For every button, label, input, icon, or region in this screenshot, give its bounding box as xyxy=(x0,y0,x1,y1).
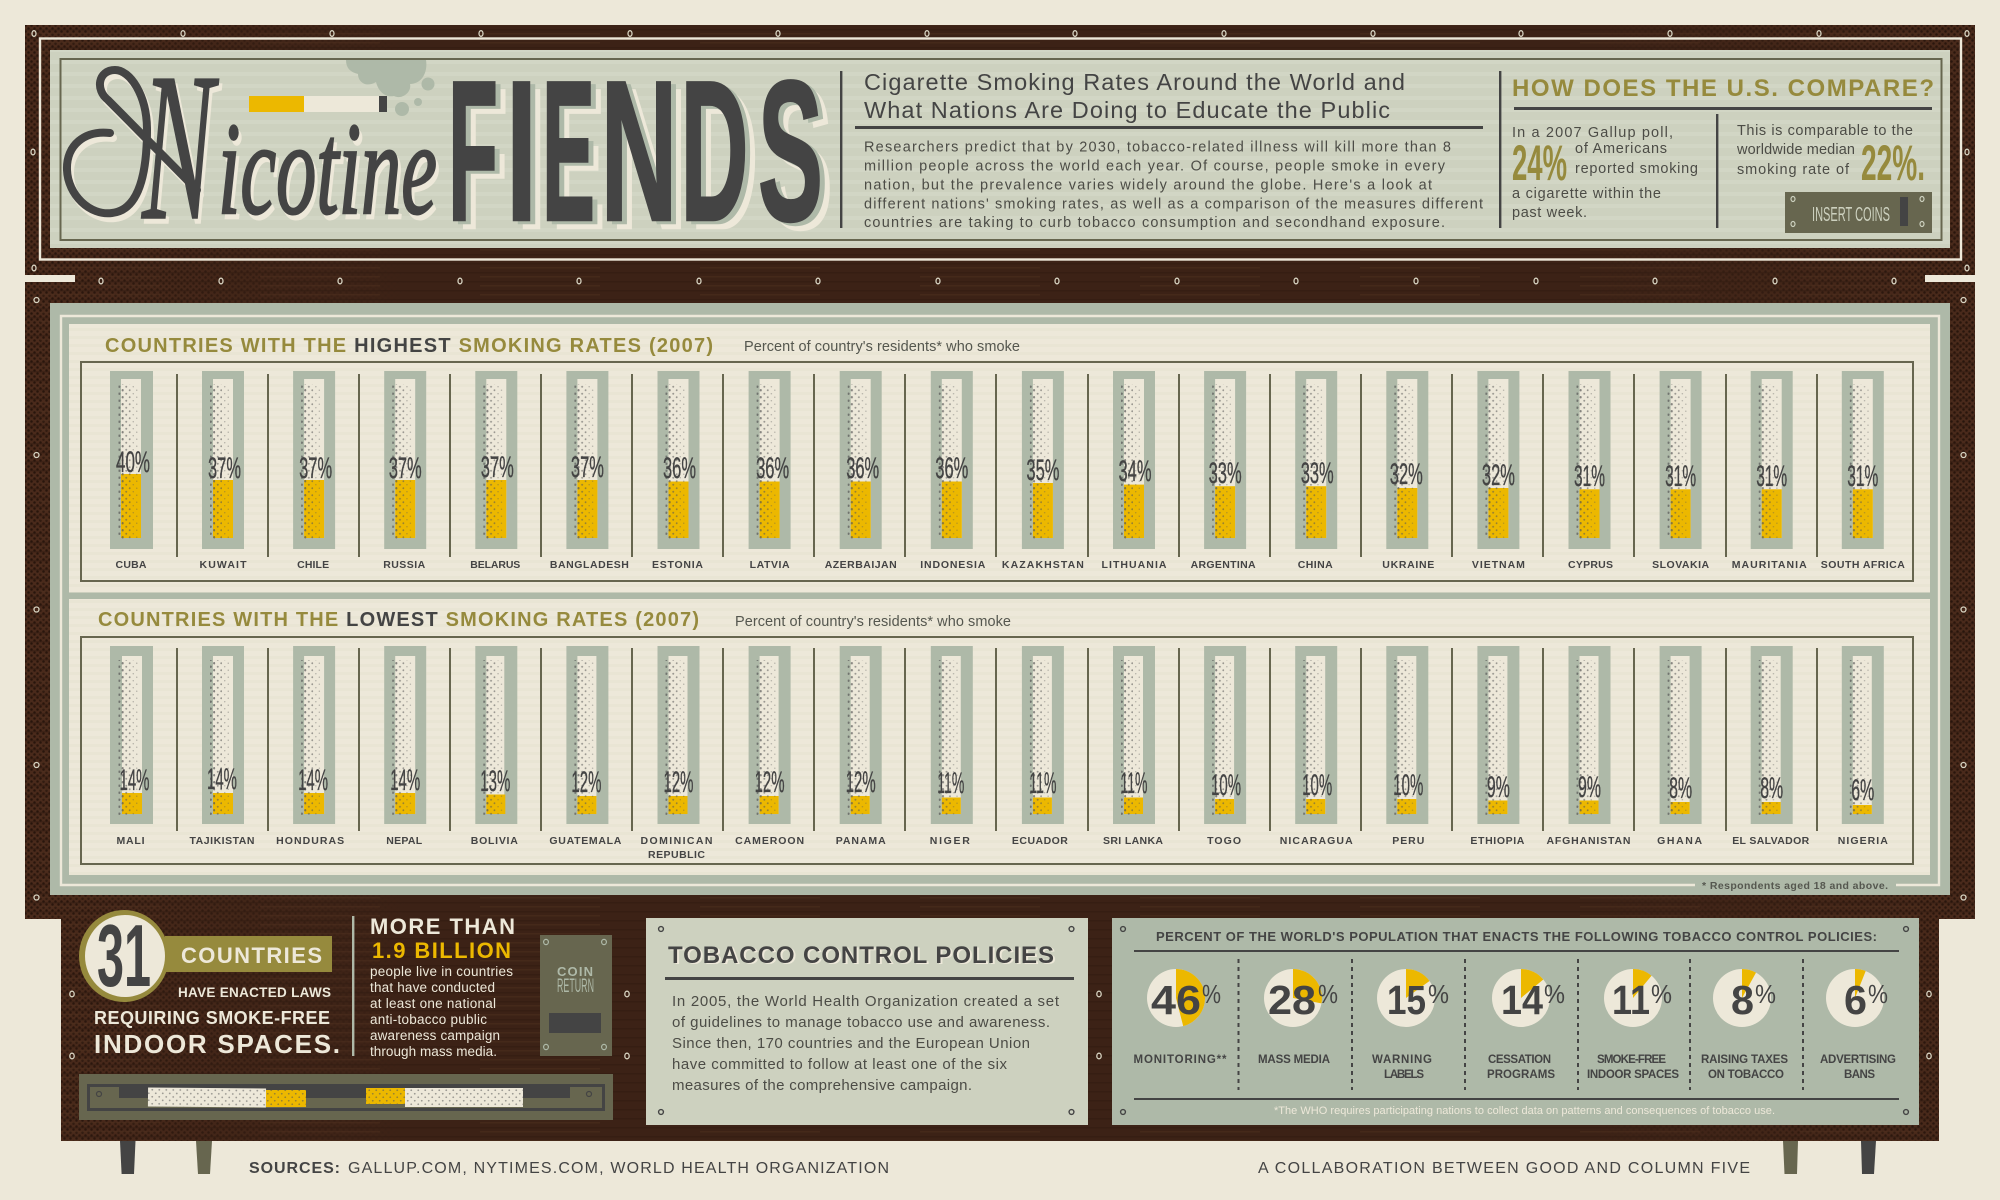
icon: cigarette xyxy=(249,96,387,112)
callout: 1.9 billion xyxy=(370,914,515,1059)
pie: advertising bans 6%: ADVERTISING xyxy=(1820,1054,1896,1066)
chart: highest smoking rates xyxy=(81,362,1913,581)
bar: Cyprus 31% xyxy=(1568,371,1613,571)
title: FIENDS: S xyxy=(758,40,823,263)
bar: China 33% xyxy=(1295,371,1337,571)
bar: Ethiopia 9% xyxy=(1470,646,1525,847)
callout: 1.9 billion: through mass media. xyxy=(370,1044,497,1059)
heading: lowest smoking rates: COUNTRIES WITH THE LOWEST SMOKING RATES (2007) xyxy=(98,609,699,631)
pie: raising taxes on tobacco 8%: 8 xyxy=(1731,977,1754,1023)
bar: South Africa 31% xyxy=(1821,371,1905,571)
pie: warning labels 15%: % xyxy=(1428,979,1449,1009)
pie: advertising bans 6%: % xyxy=(1868,979,1888,1009)
bar: Niger 11% xyxy=(930,646,973,847)
bar: Ukraine 32% xyxy=(1382,371,1434,571)
bar: Sri Lanka 11% xyxy=(1103,646,1163,847)
title: FIENDS xyxy=(448,40,833,271)
bar: Lithuania 34%: LITHUANIA xyxy=(1102,559,1167,571)
title: FIENDS: I xyxy=(516,48,547,271)
bar: Ghana 8%: GHANA xyxy=(1657,835,1703,847)
bar: Dominican Republic 12%: DOMINICAN xyxy=(640,835,712,847)
bar: Kazakhstan 35%: KAZAKHSTAN xyxy=(1002,559,1084,571)
cigarette tray xyxy=(79,1074,613,1120)
pie: raising taxes on tobacco 8%: ON TOBACCO xyxy=(1708,1069,1784,1081)
heading: highest smoking rates: COUNTRIES WITH THE HIGHEST SMOKING RATES (2007) xyxy=(105,335,713,357)
pie: smoke-free indoor spaces 11%: % xyxy=(1651,979,1672,1009)
bar: Honduras 14%: HONDURAS xyxy=(276,835,344,847)
bar: Ukraine 32%: UKRAINE xyxy=(1382,559,1434,571)
title: FIENDS: D xyxy=(690,48,758,271)
bar: Bangladesh 37%: BANGLADESH xyxy=(550,559,629,571)
bar: Afghanistan 9%: 9% xyxy=(1578,771,1601,804)
bar: Azerbaijan 36%: 36% xyxy=(846,452,879,485)
icon: smoke cloud xyxy=(346,60,434,116)
pie: monitoring 46%: % xyxy=(1202,979,1221,1009)
bar: Nicaragua 10%: 10% xyxy=(1302,769,1332,802)
credit: A COLLABORATION BETWEEN GOOD AND COLUMN FIVE xyxy=(1258,1160,1750,1177)
bar: Sri Lanka 11%: SRI LANKA xyxy=(1103,835,1163,847)
panel: tobacco control policies: TOBACCO CONTROL POLICIES xyxy=(670,943,1056,970)
title: FIENDS: S xyxy=(763,43,828,266)
bar: Ecuador 11%: ECUADOR xyxy=(1012,835,1068,847)
heading: lowest smoking rates xyxy=(98,609,1011,631)
bar: China 33%: CHINA xyxy=(1298,559,1333,571)
bar: Belarus 37%: 37% xyxy=(481,451,514,484)
title: FIENDS: N xyxy=(600,40,678,263)
bar: El Salvador 8%: EL SALVADOR xyxy=(1732,835,1810,847)
title: Nicotine: icotine xyxy=(221,100,440,247)
callout: 31 countries xyxy=(79,906,340,1059)
bar: Nigeria 6% xyxy=(1838,646,1888,847)
bar: Tajikistan 14% xyxy=(190,646,254,847)
bar: Cuba 40% xyxy=(110,371,153,571)
bar: Slovakia 31% xyxy=(1652,371,1710,571)
bar: Argentina 33%: ARGENTINA xyxy=(1191,559,1256,571)
pie: advertising bans 6%: 6 xyxy=(1844,977,1867,1023)
bar: Argentina 33%: 33% xyxy=(1209,457,1242,490)
bar: Kuwait 37%: KUWAIT xyxy=(200,559,247,571)
bar: Ukraine 32%: 32% xyxy=(1390,458,1423,491)
bar: South Africa 31%: 31% xyxy=(1847,460,1878,493)
bar: Mali 14%: MALI xyxy=(116,835,145,847)
US comparison block: reported smoking xyxy=(1575,161,1698,177)
bar: Ethiopia 9%: ETHIOPIA xyxy=(1470,835,1525,847)
panel: percent of population by policy: *The WHO requires participating nations to collect data on patterns and consequences of tobacco use. xyxy=(1274,1105,1775,1117)
callout: 1.9 billion: that have conducted xyxy=(370,980,495,995)
panel: tobacco control policies: of guidelines to manage tobacco use and awareness. xyxy=(672,1014,1050,1031)
bar: Azerbaijan 36%: AZERBAIJAN xyxy=(825,559,897,571)
panel: percent of population by policy xyxy=(1112,918,1919,1125)
intro text block: Cigarette Smoking Rates Around the World and xyxy=(864,69,1405,95)
pie: cessation programs 14%: PROGRAMS xyxy=(1487,1069,1555,1081)
title: FIENDS: F xyxy=(458,48,508,271)
heading: highest smoking rates: Percent of country's residents* who smoke xyxy=(744,339,1020,355)
US comparison block: This is comparable to the xyxy=(1737,123,1913,139)
bar: Bangladesh 37% xyxy=(550,371,629,571)
pie: mass media 28% xyxy=(1258,969,1338,1066)
bar: Sri Lanka 11%: 11% xyxy=(1120,767,1148,800)
pie: raising taxes on tobacco 8%: RAISING TAXES xyxy=(1701,1054,1788,1066)
pie: warning labels 15%: 15 xyxy=(1387,977,1426,1023)
pie: advertising bans 6% xyxy=(1820,969,1896,1081)
panel: tobacco control policies: TOBACCO CONTROL POLICIES xyxy=(668,942,1054,969)
callout: 31 countries: COUNTRIES xyxy=(181,943,322,968)
intro text block: different nations' smoking rates, as well as a comparison of the measures different xyxy=(864,196,1483,212)
bar: Mali 14%: 14% xyxy=(120,764,150,797)
pie: warning labels 15% xyxy=(1372,969,1449,1081)
bar: Dominican Republic 12%: 12% xyxy=(664,766,694,799)
title: FIENDS: E xyxy=(542,40,595,263)
pie: monitoring 46%: 46 xyxy=(1151,977,1201,1023)
pie: mass media 28%: MASS MEDIA xyxy=(1258,1054,1330,1066)
header panel: S xyxy=(768,48,833,271)
bar: Estonia 36%: ESTONIA xyxy=(652,559,703,571)
panel: tobacco control policies: have committed to follow at least one of the six xyxy=(672,1056,1008,1073)
title: FIENDS: F xyxy=(453,43,503,266)
title: FIENDS: I xyxy=(506,40,537,263)
bar: Azerbaijan 36% xyxy=(825,371,897,571)
US comparison block: 24% xyxy=(1512,135,1567,191)
bar: Bolivia 13%: BOLIVIA xyxy=(471,835,518,847)
bar: Belarus 37% xyxy=(470,371,520,571)
bar: Mali 14% xyxy=(110,646,153,847)
intro text block: countries are taking to curb tobacco consumption and secondhand exposure. xyxy=(864,215,1445,231)
bar: Cuba 40%: 40% xyxy=(116,446,150,479)
bar: Slovakia 31%: SLOVAKIA xyxy=(1652,559,1710,571)
panel: percent of population by policy: PERCENT OF THE WORLD'S POPULATION THAT ENACTS THE FOLLOWING TOBACCO CONTROL POLICIES: xyxy=(1156,929,1877,944)
pie: smoke-free indoor spaces 11%: INDOOR SPACES xyxy=(1587,1069,1679,1081)
bar: Vietnam 32% xyxy=(1472,371,1525,571)
bar: Guatemala 12% xyxy=(549,646,622,847)
callout: 1.9 billion: anti-tobacco public xyxy=(370,1012,487,1027)
sources: SOURCES: xyxy=(249,1160,340,1177)
bar: Mauritania 31%: 31% xyxy=(1756,460,1787,493)
bar: Honduras 14% xyxy=(276,646,344,847)
pie: warning labels 15%: LABELS xyxy=(1384,1069,1424,1081)
bar: Honduras 14%: 14% xyxy=(298,764,328,797)
callout: 1.9 billion: at least one national xyxy=(370,996,496,1011)
title: Nicotine xyxy=(67,29,440,269)
title: FIENDS: F xyxy=(448,40,498,263)
bar: Bangladesh 37%: 37% xyxy=(571,451,604,484)
bar: Nigeria 6%: 6% xyxy=(1851,774,1874,807)
US comparison block: of Americans xyxy=(1575,141,1667,157)
bar: Nepal 14%: 14% xyxy=(390,764,420,797)
heading: lowest smoking rates: Percent of country's residents* who smoke xyxy=(735,614,1011,630)
callout: 31 countries: 31 xyxy=(97,906,151,1005)
pie: advertising bans 6%: BANS xyxy=(1844,1069,1875,1081)
callout: 31 countries: REQUIRING SMOKE-FREE xyxy=(94,1008,330,1028)
bar: Afghanistan 9% xyxy=(1546,646,1630,847)
bar: Bolivia 13%: 13% xyxy=(480,765,510,798)
US comparison block: a cigarette within the xyxy=(1512,186,1661,202)
pie: monitoring 46% xyxy=(1134,969,1227,1066)
title: Nicotine: N xyxy=(144,34,222,269)
bar: Estonia 36% xyxy=(652,371,703,571)
bar: Panama 12% xyxy=(836,646,886,847)
bar: Vietnam 32%: 32% xyxy=(1482,459,1515,492)
bar: Indonesia 36%: INDONESIA xyxy=(920,559,986,571)
bar: Indonesia 36%: 36% xyxy=(935,452,968,485)
bar: Guatemala 12%: GUATEMALA xyxy=(549,835,622,847)
panel: tobacco control policies xyxy=(646,918,1088,1125)
bar: Niger 11%: 11% xyxy=(937,767,964,800)
intro text block: Researchers predict that by 2030, tobacco-related illness will kill more than 8 xyxy=(864,140,1451,156)
US comparison block: past week. xyxy=(1512,205,1587,221)
US comparison block: worldwide median xyxy=(1736,142,1855,158)
bar: Nicaragua 10% xyxy=(1280,646,1353,847)
heading: highest smoking rates xyxy=(105,335,1020,357)
pie: cessation programs 14%: CESSATION xyxy=(1488,1054,1551,1066)
bar: Belarus 37%: BELARUS xyxy=(470,559,520,571)
bar: Kuwait 37% xyxy=(200,371,247,571)
coin return plate: COIN xyxy=(557,964,593,979)
pie: mass media 28%: 28 xyxy=(1268,977,1316,1023)
bar: Bolivia 13% xyxy=(471,646,518,847)
divider xyxy=(352,916,354,1056)
bar: Togo 10%: TOGO xyxy=(1207,835,1241,847)
bar: Panama 12%: 12% xyxy=(846,766,876,799)
bar: Cameroon 12%: 12% xyxy=(755,766,785,799)
US comparison block: HOW DOES THE U.S. COMPARE? xyxy=(1512,75,1934,102)
intro text block: nation, but the prevalence varies widely around the globe. Here's a look at xyxy=(864,178,1432,194)
bar: Nicaragua 10%: NICARAGUA xyxy=(1280,835,1353,847)
callout: 1.9 billion: people live in countries xyxy=(370,964,513,979)
bar: Ecuador 11% xyxy=(1012,646,1068,847)
US comparison block: smoking rate of xyxy=(1737,162,1850,178)
bar: Ethiopia 9%: 9% xyxy=(1487,771,1510,804)
bar: Cyprus 31%: 31% xyxy=(1574,460,1605,493)
bar: Russia 37%: 37% xyxy=(389,452,422,485)
bar: Argentina 33% xyxy=(1191,371,1256,571)
intro text block: million people across the world each year. Of course, people smoke in every xyxy=(864,158,1446,174)
bar: Latvia 36% xyxy=(749,371,791,571)
title: FIENDS: N xyxy=(610,48,688,271)
bar: Tajikistan 14%: TAJIKISTAN xyxy=(190,835,254,847)
bar: Ghana 8% xyxy=(1657,646,1703,847)
title: FIENDS: D xyxy=(680,40,748,263)
title: FIENDS: I xyxy=(511,43,542,266)
bar: Peru 10% xyxy=(1386,646,1428,847)
bar: Peru 10%: PERU xyxy=(1392,835,1424,847)
bar: Peru 10%: 10% xyxy=(1393,769,1423,802)
bar: Slovakia 31%: 31% xyxy=(1665,460,1696,493)
panel: tobacco control policies: Since then, 170 countries and the European Union xyxy=(672,1035,1030,1052)
title: FIENDS: D xyxy=(686,43,754,266)
bar: Latvia 36%: 36% xyxy=(756,452,789,485)
pie: smoke-free indoor spaces 11%: SMOKE-FREE xyxy=(1597,1054,1666,1066)
bar: Kazakhstan 35% xyxy=(1002,371,1084,571)
US comparison block: 22%. xyxy=(1861,135,1925,191)
bar: Russia 37%: RUSSIA xyxy=(383,559,426,571)
bar: Nepal 14% xyxy=(384,646,426,847)
bar: Dominican Republic 12% xyxy=(640,646,712,861)
bar: Latvia 36%: LATVIA xyxy=(750,559,790,571)
bar: Chile 37% xyxy=(293,371,335,571)
insert coins plate xyxy=(1785,192,1932,233)
title: FIENDS: E xyxy=(547,43,600,266)
bar: Kuwait 37%: 37% xyxy=(208,452,241,485)
US comparison block xyxy=(1499,71,1934,233)
pie: warning labels 15%: WARNING xyxy=(1372,1054,1432,1066)
chart: lowest smoking rates xyxy=(81,637,1913,864)
bar: Cuba 40%: CUBA xyxy=(116,559,147,571)
bar: Kazakhstan 35%: 35% xyxy=(1026,454,1059,487)
pie: smoke-free indoor spaces 11% xyxy=(1587,969,1679,1081)
bar: Chile 37%: 37% xyxy=(299,452,332,485)
callout: 31 countries: INDOOR SPACES. xyxy=(94,1029,340,1059)
bar: Cyprus 31%: CYPRUS xyxy=(1568,559,1613,571)
bar: Cameroon 12%: CAMEROON xyxy=(735,835,804,847)
bar: China 33%: 33% xyxy=(1301,457,1334,490)
bar: Nigeria 6%: NIGERIA xyxy=(1838,835,1888,847)
bar: Togo 10% xyxy=(1204,646,1246,847)
bar: Nepal 14%: NEPAL xyxy=(386,835,423,847)
bar: Togo 10%: 10% xyxy=(1211,769,1241,802)
title: Nicotine: icotine xyxy=(218,95,437,242)
main chart panel xyxy=(50,303,1950,895)
bar: Tajikistan 14%: 14% xyxy=(207,763,237,796)
bar: Mauritania 31%: MAURITANIA xyxy=(1732,559,1807,571)
intro text block xyxy=(840,69,1483,231)
bar: Dominican Republic 12%: REPUBLIC xyxy=(648,849,705,861)
bar: Guatemala 12%: 12% xyxy=(571,766,601,799)
bar: Indonesia 36% xyxy=(920,371,986,571)
main chart panel: * Respondents aged 18 and above. xyxy=(1702,880,1888,892)
pie: raising taxes on tobacco 8%: % xyxy=(1755,979,1776,1009)
bar: Ghana 8%: 8% xyxy=(1669,772,1692,805)
pie: mass media 28%: % xyxy=(1318,979,1338,1009)
bar: Chile 37%: CHILE xyxy=(297,559,329,571)
intro text block: What Nations Are Doing to Educate the Public xyxy=(864,97,1390,123)
callout: 1.9 billion: awareness campaign xyxy=(370,1028,500,1043)
pie: cessation programs 14% xyxy=(1487,969,1565,1081)
bar: Lithuania 34%: 34% xyxy=(1118,455,1152,488)
US comparison block: In a 2007 Gallup poll, xyxy=(1512,125,1673,141)
bar: Panama 12%: PANAMA xyxy=(836,835,886,847)
pie: monitoring 46%: MONITORING** xyxy=(1134,1054,1227,1066)
bar: El Salvador 8%: 8% xyxy=(1760,772,1783,805)
title: Nicotine: N xyxy=(141,29,219,264)
panel: tobacco control policies: In 2005, the World Health Organization created a set xyxy=(672,993,1060,1010)
bar: South Africa 31%: SOUTH AFRICA xyxy=(1821,559,1905,571)
bar: El Salvador 8% xyxy=(1732,646,1810,847)
panel: tobacco control policies: measures of the comprehensive campaign. xyxy=(672,1077,972,1094)
bar: Mauritania 31% xyxy=(1732,371,1807,571)
bar: Lithuania 34% xyxy=(1102,371,1167,571)
pie: cessation programs 14%: % xyxy=(1544,979,1565,1009)
bar: Vietnam 32%: VIETNAM xyxy=(1472,559,1525,571)
pie: smoke-free indoor spaces 11%: 11 xyxy=(1612,977,1650,1023)
bar: Russia 37% xyxy=(383,371,426,571)
bar: Ecuador 11%: 11% xyxy=(1029,767,1056,800)
pie: cessation programs 14%: 14 xyxy=(1501,977,1543,1023)
bar: Niger 11%: NIGER xyxy=(930,835,970,847)
title: FIENDS: N xyxy=(606,43,682,266)
cabinet legs xyxy=(120,1141,1876,1174)
coin return plate xyxy=(540,935,612,1056)
callout: 1.9 billion: MORE THAN xyxy=(370,914,515,939)
title: FIENDS: E xyxy=(552,48,605,271)
insert coins plate: INSERT COINS xyxy=(1812,204,1890,226)
bar: Cameroon 12% xyxy=(735,646,804,847)
bar: Afghanistan 9%: AFGHANISTAN xyxy=(1546,835,1630,847)
bar: Estonia 36%: 36% xyxy=(663,452,696,485)
pie: raising taxes on tobacco 8% xyxy=(1701,969,1788,1081)
callout: 1.9 billion: 1.9 BILLION xyxy=(372,938,511,963)
sources: GALLUP.COM, NYTIMES.COM, WORLD HEALTH ORGANIZATION xyxy=(348,1160,889,1177)
coin return plate: RETURN xyxy=(557,976,594,997)
callout: 31 countries: HAVE ENACTED LAWS xyxy=(178,985,331,1000)
